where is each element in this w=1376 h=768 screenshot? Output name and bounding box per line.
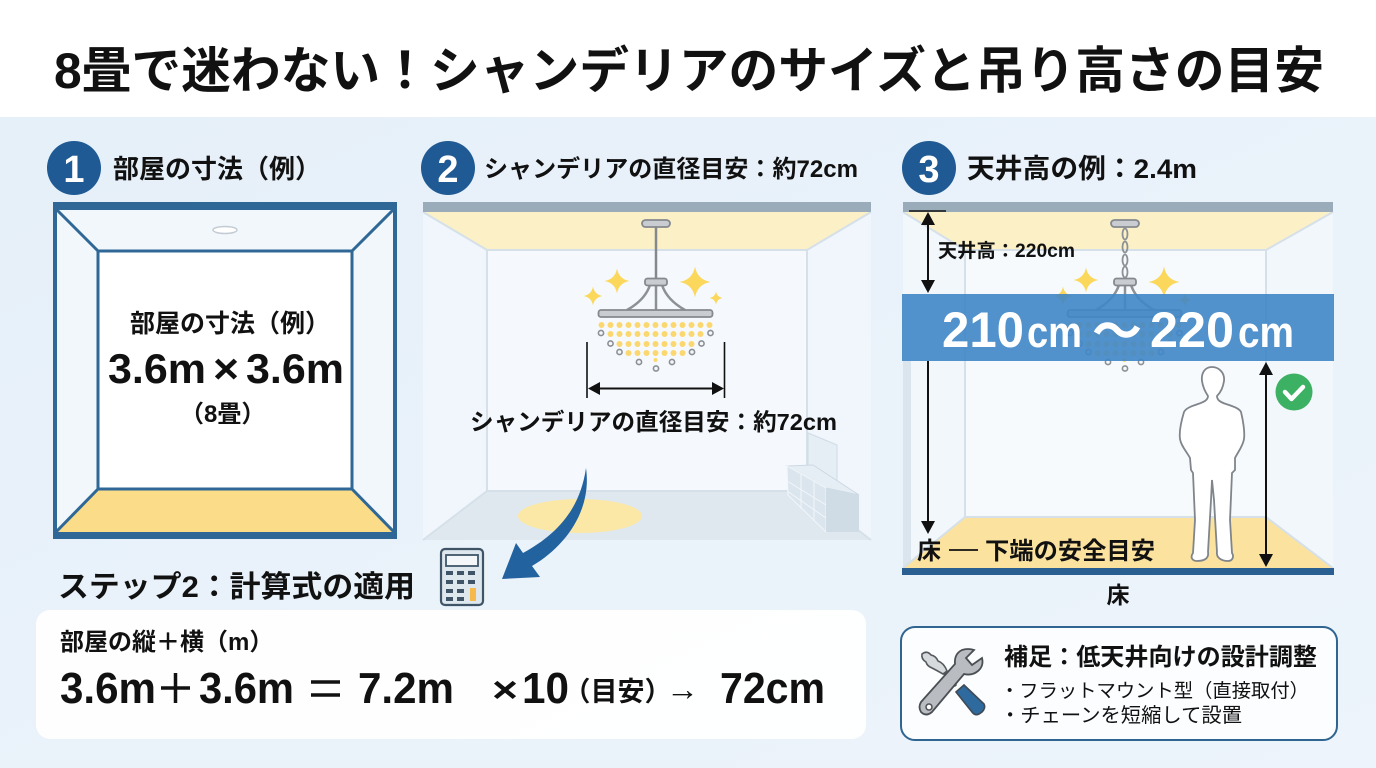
step 3 heading: 天井高の例：2.4m: [967, 154, 1197, 184]
formula calculation: 3.6m: [60, 664, 156, 713]
rug: [518, 499, 642, 533]
ceiling clearance dimension: 天井高：220cm: [938, 240, 1075, 262]
step 3 heading: [902, 141, 1197, 195]
chandelier: [1054, 220, 1192, 371]
floor safety label: 下端の安全目安: [985, 538, 1155, 565]
formula calculation: （目安）: [564, 677, 672, 707]
formula calculation: 10: [522, 664, 569, 713]
note list: ・フラットマウント型（直接取付）: [1000, 680, 1309, 702]
step 3 heading: 3: [918, 149, 940, 191]
floor clearance dimension: [921, 361, 935, 534]
formula calculation: 3.6m: [199, 664, 294, 713]
icon: wrench and screwdriver: [920, 649, 985, 715]
height band: [902, 294, 1334, 361]
panel: formula: [36, 610, 866, 739]
step 2 heading: [421, 141, 858, 195]
height band: cm: [1027, 308, 1082, 357]
chandelier: [584, 220, 722, 371]
room size text: 3.6m: [108, 345, 206, 392]
diameter label: シャンデリアの直径目安：約72cm: [470, 408, 837, 435]
step 1 heading: 部屋の寸法（例）: [113, 154, 321, 184]
panel: room dimensions: [53, 202, 397, 539]
safe height dimension: [1259, 362, 1273, 567]
step 1 heading: 1: [63, 149, 85, 191]
formula calculation: 72cm: [720, 664, 825, 713]
diameter dimension arrow: [587, 342, 724, 398]
TV and cabinet: [787, 433, 859, 532]
height band: cm: [1238, 308, 1294, 357]
floor safety label: 床: [917, 538, 941, 565]
formula calculation: [60, 664, 825, 713]
panel: formula: 部屋の縦＋横（m）: [60, 629, 273, 656]
panel: low ceiling note: [901, 627, 1337, 740]
icon: green check: [1276, 374, 1312, 410]
height band: 220: [1150, 302, 1234, 358]
step 1 heading: [47, 141, 321, 195]
height band: ～: [1092, 304, 1142, 360]
floor label: 床: [1106, 582, 1130, 608]
room size text: ×: [213, 345, 239, 392]
room size text: [108, 310, 344, 428]
panel: low ceiling note: 補足：低天井向けの設計調整: [1004, 644, 1317, 671]
arrow: from diameter to calculation: [502, 468, 587, 579]
title: 8畳で迷わない！シャンデリアのサイズと吊り高さの目安: [54, 43, 1324, 99]
formula calculation: →: [666, 671, 699, 707]
step 2 heading: シャンデリアの直径目安：約72cm: [484, 155, 858, 183]
formula calculation: 7.2m: [358, 664, 454, 713]
note list: [1000, 680, 1309, 727]
step 2 calculation heading: ステップ2：計算式の適用: [58, 571, 415, 604]
panel: chandelier diameter: [423, 202, 871, 540]
room size text: （8畳）: [180, 401, 265, 428]
ceiling clearance dimension: [909, 211, 1075, 293]
formula calculation: ×: [492, 669, 518, 710]
room size text: 3.6m: [246, 345, 344, 392]
person silhouette: [1180, 367, 1244, 561]
icon: calculator: [441, 549, 483, 605]
panel: ceiling height: [902, 202, 1334, 608]
step 2 heading: 2: [437, 149, 459, 191]
note list: ・チェーンを短縮して設置: [1000, 704, 1242, 727]
room size text: 部屋の寸法（例）: [130, 310, 330, 338]
height band: 210: [942, 302, 1024, 358]
